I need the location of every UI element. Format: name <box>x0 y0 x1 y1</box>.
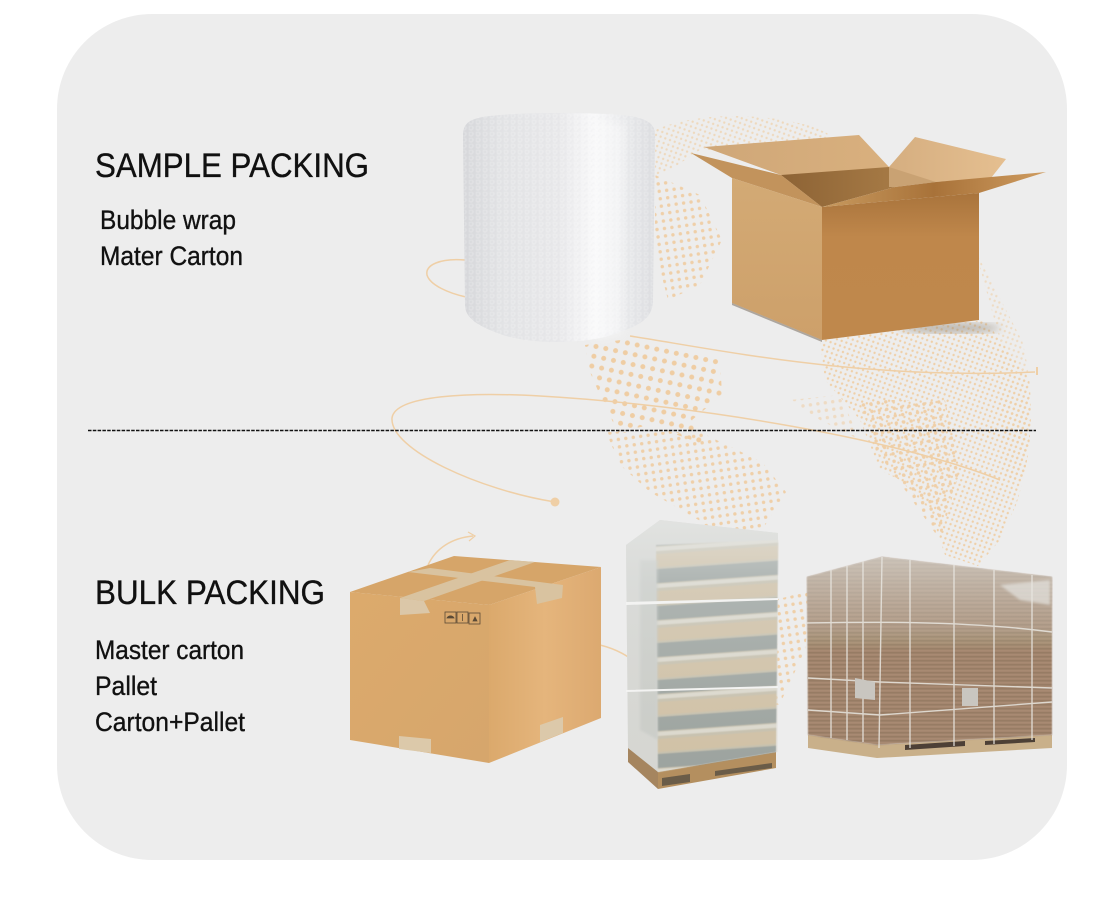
dashed divider <box>88 430 1036 432</box>
text block: sample packing items <box>100 205 243 271</box>
straps <box>807 557 1052 748</box>
tall stretch-wrapped pallet <box>626 520 778 789</box>
carton handling icons <box>445 612 480 624</box>
globe with dotted continents <box>585 116 1032 708</box>
text block: bulk packing items: Master carton <box>95 635 244 665</box>
text block: bulk packing items <box>95 635 245 737</box>
closed taped carton <box>350 556 601 763</box>
bubble wrap roll <box>463 113 655 342</box>
text block: bulk packing items: Pallet <box>95 671 157 701</box>
text block: sample packing items: Bubble wrap <box>100 205 236 235</box>
heading: bulk packing: BULK PACKING <box>95 574 325 612</box>
open cardboard box <box>691 135 1046 342</box>
orbit lines <box>392 260 1038 665</box>
text block: sample packing items: Mater Carton <box>100 241 243 271</box>
heading: sample packing: SAMPLE PACKING <box>95 147 369 185</box>
text block: bulk packing items: Carton+Pallet <box>95 707 245 737</box>
wide stretch-wrapped pallet <box>807 557 1052 758</box>
